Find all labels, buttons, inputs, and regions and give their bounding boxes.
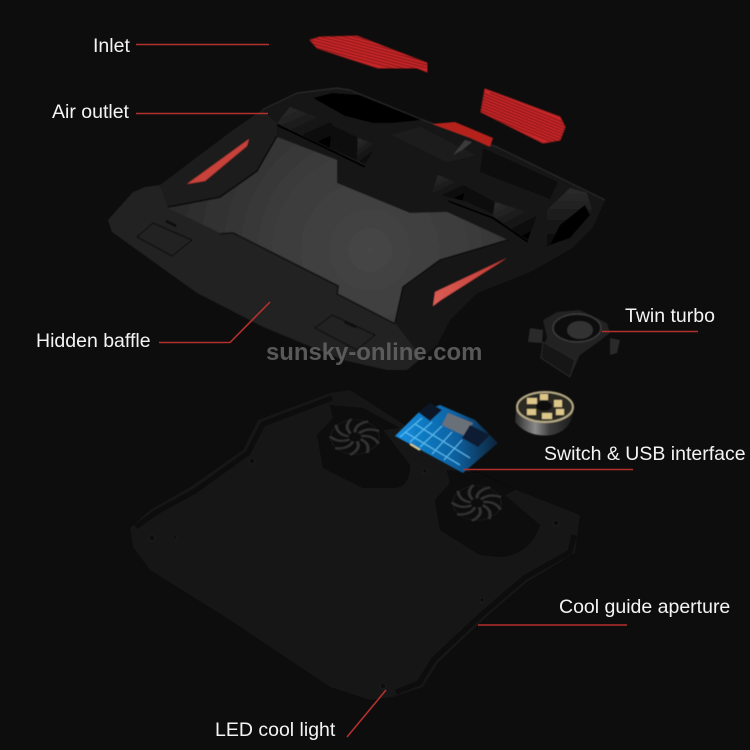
label: inlet: Inlet	[93, 35, 130, 57]
right red stripe	[433, 258, 507, 306]
top cover body	[108, 88, 605, 370]
lighter rear wedge	[392, 127, 475, 162]
left alcove shadow	[277, 125, 365, 167]
fan one	[329, 419, 380, 456]
left red stripe	[187, 139, 249, 184]
center support block	[337, 158, 455, 213]
screen ridge shadow	[168, 136, 508, 323]
right alcove end	[493, 202, 537, 240]
base rim left	[136, 398, 332, 527]
end cap	[547, 188, 592, 247]
leader line: switch and USB	[463, 468, 633, 470]
switch and USB circuit board	[395, 403, 498, 473]
rear top highlight	[262, 88, 605, 200]
leader line: inlet	[136, 44, 269, 46]
right alcove divider	[463, 186, 495, 214]
board connectors	[418, 403, 442, 421]
mounting posts	[149, 458, 559, 689]
leader line: air outlet	[136, 112, 268, 114]
base rim right	[396, 535, 574, 692]
label: cool guide aperture: Cool guide aperture	[559, 596, 730, 618]
left alcove divider	[330, 125, 357, 160]
left air outlet alcove	[277, 107, 332, 148]
inlet cover right	[480, 89, 570, 149]
LED ring	[515, 392, 573, 435]
screen surface	[168, 137, 508, 323]
baffle step shadow	[220, 233, 395, 324]
recessed cavity	[212, 462, 500, 646]
bottom base panel	[130, 390, 580, 700]
base outline	[130, 390, 580, 700]
right air outlet alcove	[432, 175, 465, 201]
leader line: LED cool light	[347, 690, 386, 737]
twin turbo blower fan	[528, 310, 620, 377]
vent window left	[313, 93, 422, 123]
clip right	[315, 315, 375, 350]
inlet cover left	[309, 34, 428, 74]
fan housing two	[435, 470, 540, 557]
left wing	[160, 110, 277, 208]
leader line: cool guide aperture	[478, 624, 627, 626]
leader line: hidden baffle	[159, 302, 270, 342]
right alcove shadow	[432, 195, 528, 242]
label: air outlet: Air outlet	[52, 101, 130, 123]
leader line: twin turbo	[602, 330, 698, 332]
red center tab	[432, 122, 493, 147]
top cover panel	[108, 88, 605, 370]
label: hidden baffle: Hidden baffle	[36, 330, 151, 352]
watermark: sunsky-online.com	[266, 339, 482, 366]
left alcove end	[357, 138, 377, 164]
rear raised band	[262, 88, 605, 248]
vent window right	[480, 148, 558, 199]
middle wedge	[453, 140, 472, 155]
label: switch and USB interface: Switch & USB interface	[544, 443, 746, 465]
end cap vent	[550, 205, 590, 245]
clip left	[137, 221, 192, 256]
label: LED cool light: LED cool light	[215, 719, 336, 741]
fan housing one	[317, 405, 410, 488]
USB port	[442, 413, 473, 436]
right wing	[395, 240, 572, 358]
label: twin turbo: Twin turbo	[625, 305, 715, 327]
fan two	[451, 485, 502, 522]
